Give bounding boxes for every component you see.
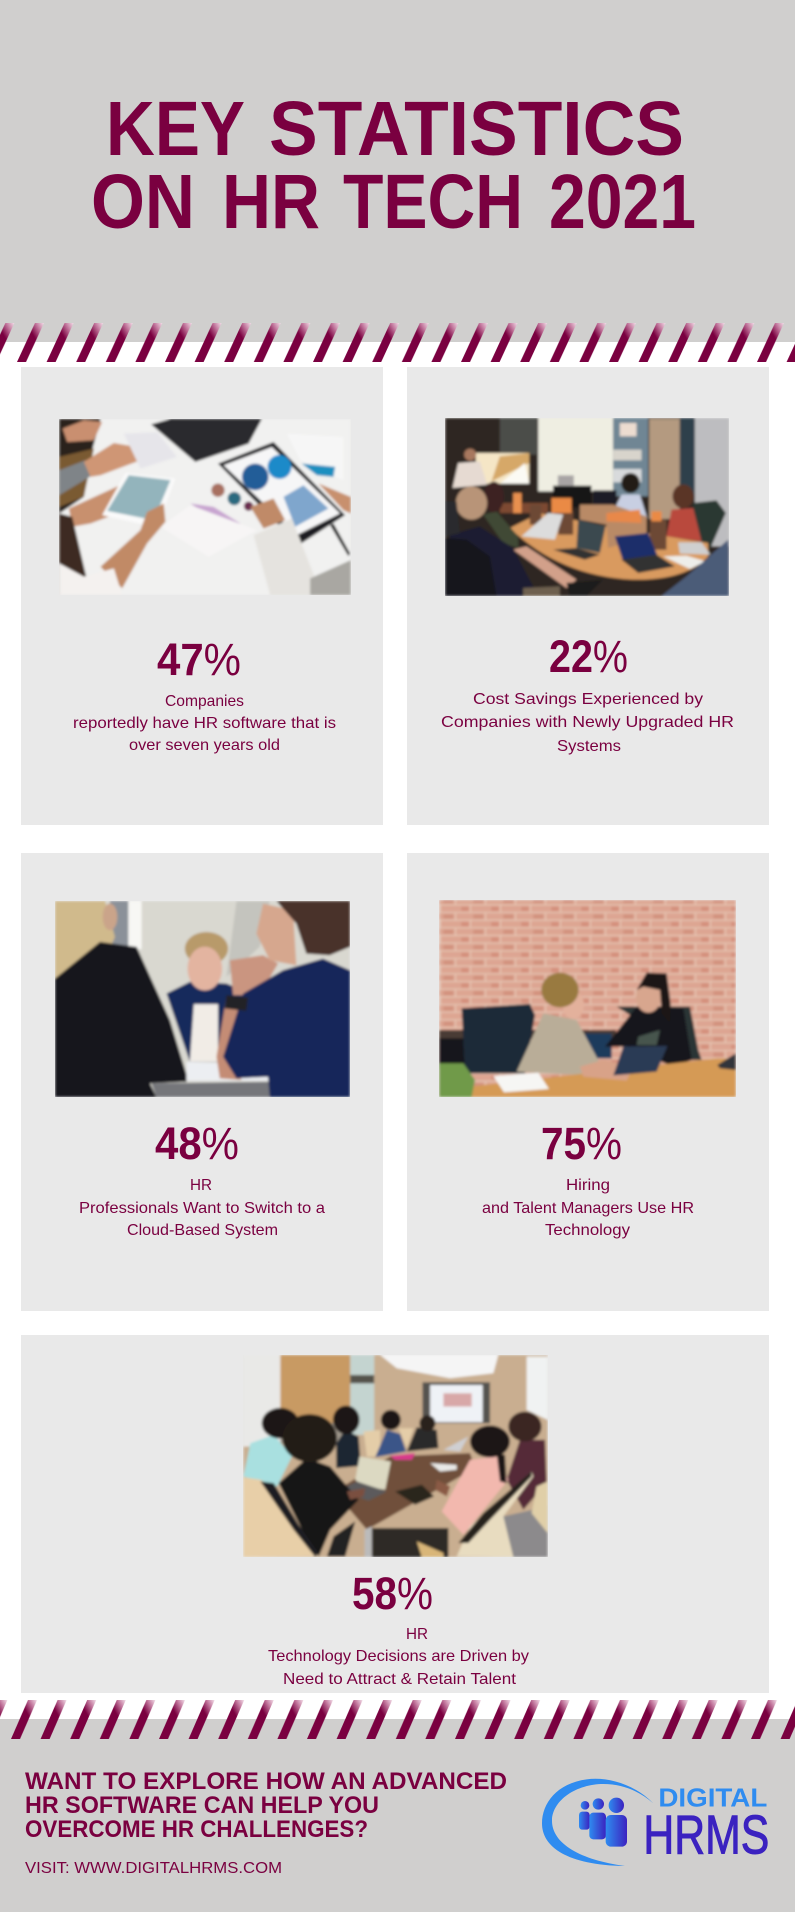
panel: 58% decisions xyxy=(21,1335,769,1693)
description 47%: reportedly have HR software that is xyxy=(73,715,336,732)
description 75%: and Talent Managers Use HR xyxy=(482,1200,694,1217)
description 48%: Professionals Want to Switch to a xyxy=(79,1200,325,1217)
description 58%: Technology Decisions are Driven by xyxy=(268,1648,529,1665)
title: KEY xyxy=(106,86,245,172)
title: TECH xyxy=(343,159,523,245)
title: STATISTICS xyxy=(269,86,684,172)
panel: 75% hiring managers xyxy=(407,853,769,1311)
description 22%: Systems xyxy=(557,738,621,755)
call to action heading: WANT TO EXPLORE HOW AN ADVANCED xyxy=(25,1768,507,1795)
panel: 48% cloud based xyxy=(21,853,383,1311)
description 48% xyxy=(79,1177,325,1239)
description 75%: Hiring xyxy=(566,1177,610,1194)
description 75% xyxy=(482,1177,694,1239)
title: ON xyxy=(91,159,195,245)
stat 75%: 75% xyxy=(541,1118,622,1169)
description 47% xyxy=(73,693,336,754)
title: 2021 xyxy=(549,159,696,245)
call to action heading: HR SOFTWARE CAN HELP YOU xyxy=(25,1792,379,1819)
title xyxy=(91,86,696,245)
description 22%: Companies with Newly Upgraded HR xyxy=(441,714,734,731)
photo: team reviewing charts xyxy=(59,419,351,595)
stat 58%: 58% xyxy=(352,1568,433,1619)
call to action heading xyxy=(25,1768,507,1843)
description 58%: Need to Attract & Retain Talent xyxy=(283,1671,517,1688)
description 47%: over seven years old xyxy=(129,737,280,754)
photo: interview across the table xyxy=(55,901,350,1097)
stat 22%: 22% xyxy=(549,631,628,682)
description 22% xyxy=(441,691,734,755)
logo people xyxy=(579,1798,627,1847)
logo swoosh xyxy=(542,1779,653,1866)
header band xyxy=(0,0,795,342)
bottom stripe band xyxy=(0,1700,795,1739)
panel: 47% companies xyxy=(21,367,383,825)
description 58%: HR xyxy=(406,1626,428,1643)
photo: two women at a table with a tablet xyxy=(439,900,736,1097)
panel: 22% cost savings xyxy=(407,367,769,825)
description 22%: Cost Savings Experienced by xyxy=(473,691,703,708)
website link: VISIT: WWW.DIGITALHRMS.COM xyxy=(25,1860,282,1877)
stat 47%: 47% xyxy=(157,634,241,685)
description 75%: Technology xyxy=(545,1222,630,1239)
footer band xyxy=(0,1719,795,1912)
stat 48%: 48% xyxy=(155,1118,239,1169)
title: HR xyxy=(222,159,320,245)
description 47%: Companies xyxy=(165,693,244,710)
description 48%: Cloud-Based System xyxy=(127,1222,278,1239)
photo: team around a meeting table xyxy=(243,1355,548,1557)
call to action heading: OVERCOME HR CHALLENGES? xyxy=(25,1816,368,1843)
logo: Digital HRMS xyxy=(542,1778,769,1866)
photo: conference room presentation xyxy=(445,418,729,596)
logo wordmark: DIGITAL xyxy=(658,1783,767,1813)
description 48%: HR xyxy=(190,1177,212,1194)
top stripe band xyxy=(0,323,795,362)
description 58% xyxy=(268,1626,529,1688)
